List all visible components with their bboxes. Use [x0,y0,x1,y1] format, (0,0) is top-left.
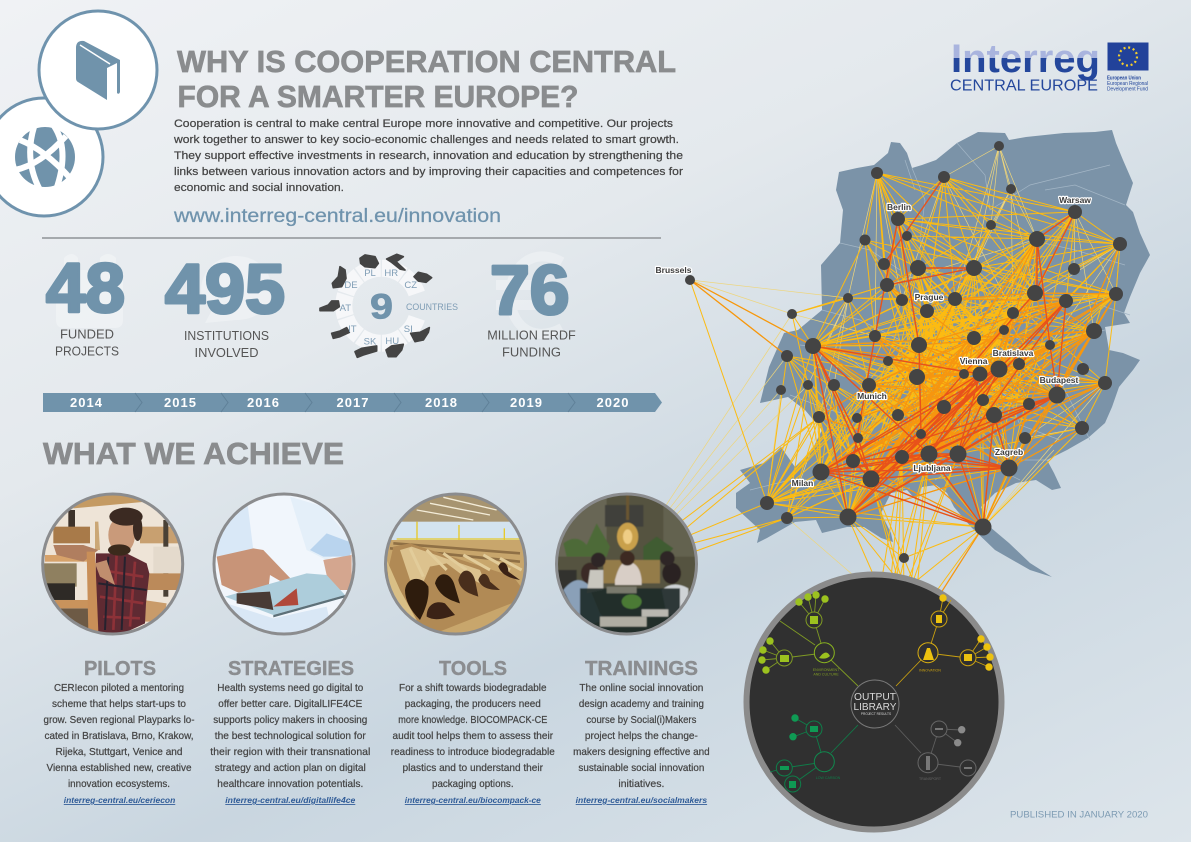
timeline 2014 to 2020: 2014 [70,395,103,410]
panel: pilots: Rijeka, Stuttgart, Venice and [56,746,183,758]
network: city labels: Warsaw [1059,195,1091,205]
timeline 2014 to 2020 [43,393,662,412]
publication date: PUBLISHED IN JANUARY 2020 [1010,810,1148,820]
stat: million ERDF funding: FUNDING [502,344,561,360]
heading: what we achieve: WHAT WE ACHIEVE [43,436,344,471]
panel: strategies: the best technological solution for [215,730,366,742]
network: city labels: Bratislava [993,348,1034,358]
timeline 2014 to 2020: 2020 [596,395,628,410]
panel: tools: more knowledge. BIOCOMPACK-CE [398,714,547,726]
network: city labels: Munich [857,391,887,401]
branch: innovation: INNOVATION [919,668,941,672]
center hub: LIBRARY [854,701,896,713]
panel: pilots [44,658,195,805]
panel: tools: interreg-central.eu/biocompack-ce [405,795,541,805]
panel: pilots: scheme that helps start-ups to [52,698,186,710]
stat: nine countries wheel [320,254,458,357]
map: central Europe silhouette [736,130,1150,577]
stat: funded projects: FUNDED [60,326,114,342]
timeline 2014 to 2020: 2018 [425,395,457,410]
panel: trainings: The online social innovation [579,682,704,694]
panel: trainings: initiatives. [618,778,664,790]
panel: trainings: makers designing effective and [573,746,710,758]
network: city labels: Prague [915,292,944,302]
panel: trainings: TRAININGS [585,658,698,680]
panel: trainings: design academy and training [579,698,704,710]
branch: environment and culture: ENVIRONMENT [813,668,840,672]
title: WHY IS COOPERATION CENTRAL [177,44,676,79]
panel: pilots: cated in Bratislava, Brno, Krakow, [44,730,194,742]
panel: tools: audit tool helps them to assess their [393,730,554,742]
stat: nine countries wheel: HR [384,268,398,279]
stat: million ERDF funding [487,251,576,360]
panel: strategies [210,658,370,805]
title: FOR A SMARTER EUROPE? [178,79,578,114]
photo: team meeting under light bulb [553,490,700,637]
network: city labels: Zagreb [995,447,1023,457]
logo: Interreg Central Europe [950,37,1148,94]
stat: nine countries wheel: COUNTRIES [406,302,458,313]
panel: strategies: interreg-central.eu/digitallife4ce [225,795,356,805]
panel: trainings: interreg-central.eu/socialmakers [576,795,707,805]
network: city labels [656,195,1091,488]
panel: strategies: offer better care. DigitalLIFE4CE [218,698,362,710]
network: amber connections [690,212,1120,610]
stat: nine countries wheel: DE [344,280,358,291]
stat: institutions involved: INSTITUTIONS [184,328,269,343]
network: city labels: Vienna [960,356,988,366]
stat: million ERDF funding: 76 [490,251,570,329]
branch: environment and culture [758,591,858,686]
panel: trainings [573,658,710,805]
stat: nine countries wheel: PL [364,268,376,279]
logo: Interreg Central Europe: European Union [1107,76,1141,82]
panel: pilots: CERIecon piloted a mentoring [54,682,184,694]
icon: ghost euro sign [496,256,562,334]
stat: nine countries wheel: SI [404,324,413,335]
photo: carpenter [40,490,187,637]
panel: pilots: grow. Seven regional Playparks lo- [44,714,195,726]
branch: environment and culture: AND CULTURE [813,672,839,676]
panel: pilots: interreg-central.eu/ceriecon [64,795,175,805]
panel: trainings: project helps the change- [585,730,698,742]
title [177,44,676,114]
panel: tools: readiness to introduce biodegradable [391,746,555,758]
panel: tools: TOOLS [439,658,507,680]
intro text: Cooperation is central to make central Europe more innovative and competitive. Our projects [174,118,674,130]
stat: nine countries wheel: IT [348,324,357,335]
center hub: OUTPUT [854,691,897,703]
intro text [173,118,683,194]
network: city labels: Budapest [1040,375,1079,385]
stat: million ERDF funding: MILLION ERDF [487,328,576,342]
network: city labels: Brussels [656,265,692,275]
stat: funded projects: 48 [46,249,125,327]
branch: innovation [896,594,994,686]
panel: tools: packaging, the producers need [405,698,541,710]
country silhouettes [320,254,432,357]
panel: strategies: supports policy makers in choosing [213,714,367,726]
stat: institutions involved [165,250,285,360]
intro text: work together to answer to key socio-economic challenges and needs related to smart growth. [173,134,679,146]
logo: Interreg Central Europe: CENTRAL EUROPE [950,78,1098,94]
panel: strategies: Health systems need go digital to [217,682,363,694]
panel: trainings: course by Social(i)Makers [586,714,696,726]
wheel ring segments [344,268,419,343]
stat: nine countries wheel: SK [364,336,377,348]
network: city labels: Milan [792,478,813,488]
panel: strategies: healthcare innovation potentials. [217,778,363,790]
stat: nine countries wheel: 9 [370,288,393,326]
panel: strategies: strategy and action plan on digital [215,762,366,774]
icon: EU flag [1108,42,1148,70]
center hub: PROJECT RESULTS [861,712,891,716]
photo: tablet [207,490,360,637]
network: red-orange strong connections [813,177,1075,527]
stat: funded projects: PROJECTS [55,344,119,358]
stat: nine countries wheel: HU [385,336,399,347]
intro text: links between various innovation actors and by improving their capacities and competences for [174,166,683,178]
icon: globe circle [0,98,103,216]
panel: tools: For a shift towards biodegradable [399,682,547,694]
branch: low carbon: LOW CARBON [816,776,841,780]
panel: tools [391,658,555,805]
intro text: They support effective investments in research, innovation and education by strengthening the [174,150,683,162]
timeline 2014 to 2020: 2019 [510,395,542,410]
panel: strategies: STRATEGIES [228,658,354,680]
panel: strategies: their region with their transnational [210,746,370,758]
timeline 2014 to 2020: 2015 [164,395,196,410]
photo: cardboard packaging [380,490,527,637]
network: nodes [685,141,1127,563]
intro text: economic and social innovation. [174,182,344,194]
logo: Interreg Central Europe: Development Fund [1107,86,1148,92]
icon: ghost briefcase [56,254,123,328]
branch: transport [895,721,976,781]
stat: institutions involved: INVOLVED [194,345,258,360]
panel: tools: packaging options. [432,778,514,790]
timeline 2014 to 2020: 2016 [247,395,279,410]
stat: nine countries wheel: CZ [404,280,417,291]
panel: pilots: innovation ecosystems. [68,778,170,790]
timeline 2014 to 2020: 2017 [336,395,368,410]
panel: pilots: PILOTS [84,658,156,680]
panel: pilots: Vienna established new, creative [46,762,192,774]
center hub [851,680,899,728]
stat: nine countries wheel: AT [340,303,351,314]
panel: tools: plastics and to understand their [403,762,544,774]
logo: Interreg Central Europe: Interreg [951,37,1100,81]
icon: book circle [39,11,157,129]
panel: trainings: sustainable social innovation [578,762,705,774]
panel: output library mind map [746,574,1002,830]
panel: network map of central Europe [630,130,1150,610]
logo: Interreg Central Europe: European Regional [1107,81,1148,87]
icon: ghost speech bubble [201,256,272,323]
branch: low carbon [770,714,858,792]
network: yellow connections [630,173,1120,600]
branch: transport: TRANSPORT [919,777,942,781]
network: city labels: Berlin [887,202,911,212]
map: regional borders [750,143,1130,490]
network: city labels: Ljubljana [913,463,951,473]
stat: institutions involved: 495 [165,250,285,328]
network: faint connections [630,146,1120,575]
website link: www.interreg-central.eu/innovation [173,206,501,227]
